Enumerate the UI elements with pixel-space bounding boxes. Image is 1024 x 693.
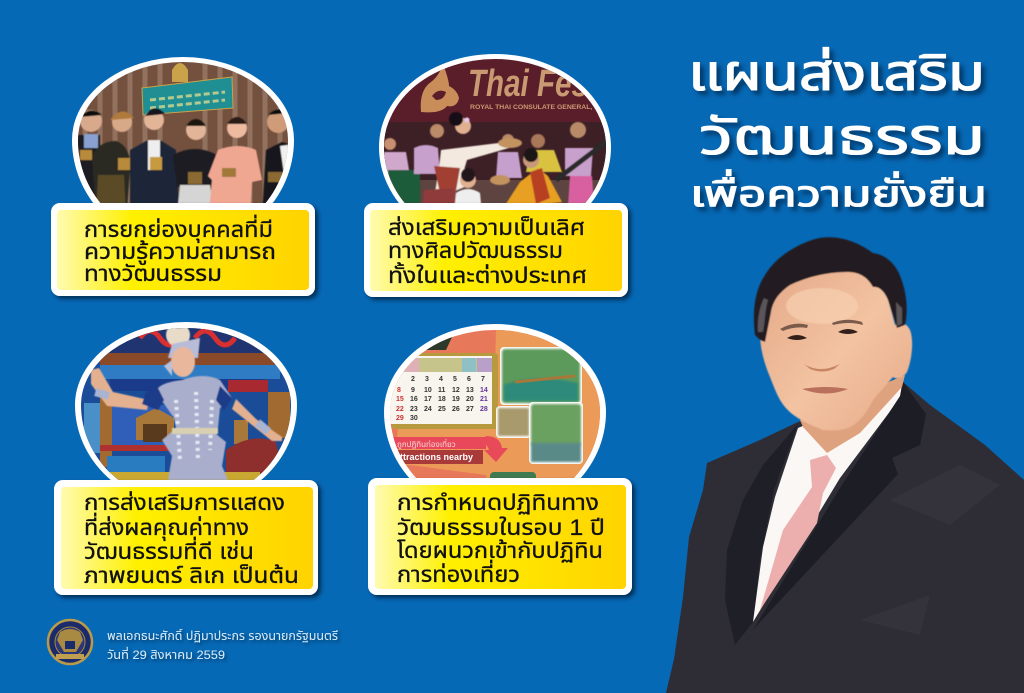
tie — [760, 455, 836, 610]
photo: tourism calendar brochure: 12 — [452, 387, 460, 394]
caption box: ความรู้ความสามารถ — [84, 239, 276, 265]
caption box — [54, 480, 318, 595]
photo: tourism calendar brochure: 13 — [466, 387, 474, 394]
photo: tourism calendar brochure: 21 — [480, 396, 488, 403]
photo: tourism calendar brochure: 9 — [411, 387, 415, 394]
photo: tourism calendar brochure: 28 — [480, 406, 488, 413]
photo: tourism calendar brochure: 23 — [410, 406, 418, 413]
caption box: ทางศิลปวัฒนธรรม — [388, 238, 563, 263]
photo: tourism calendar brochure: 26 — [452, 406, 460, 413]
caption box — [51, 203, 315, 296]
photo: tourism calendar brochure: 19 — [452, 396, 460, 403]
photo: tourism calendar brochure: 27 — [466, 406, 474, 413]
mouth — [802, 387, 848, 394]
title: เพื่อความยั่งยืน — [690, 169, 987, 214]
photo: tourism calendar brochure: 29 — [396, 415, 404, 422]
photo: tourism calendar brochure: 20 — [466, 396, 474, 403]
icon: government seal — [48, 620, 92, 664]
footer — [48, 620, 338, 664]
caption box: วัฒนธรรมในรอบ 1 ปี — [397, 515, 605, 540]
photo: tourism calendar brochure: 10 — [424, 387, 432, 394]
caption box: ที่ส่งผลคุณค่าทาง — [84, 512, 249, 541]
photo: tourism calendar brochure: 16 — [410, 396, 418, 403]
caption box: การยกย่องบุคคลที่มี — [84, 214, 273, 243]
portrait: deputy prime minister — [666, 237, 1024, 693]
photo: likay performer on stage — [75, 322, 297, 480]
panel: cultural calendar — [368, 320, 632, 595]
title — [688, 45, 987, 214]
panel: honouring cultural experts — [51, 50, 315, 296]
photo: Thai festival dance performance: ROYAL THAI CONSULATE GENERAL, CHI — [470, 105, 606, 111]
photo: tourism calendar brochure: 5 — [453, 376, 457, 383]
photo: tourism calendar brochure: 8 — [397, 387, 401, 394]
title: วัฒนธรรม — [699, 109, 985, 165]
eyebrows — [780, 320, 863, 331]
nose — [804, 364, 840, 372]
photo: Thai festival dance performance — [379, 54, 611, 203]
shirt — [753, 384, 902, 622]
photo: tourism calendar brochure: 4 — [439, 376, 443, 383]
caption box: ทั้งในและต่างประเทศ — [388, 261, 587, 288]
panel: promoting valuable performances — [54, 320, 318, 595]
panel: promoting artistic excellence — [364, 50, 628, 297]
photo: tourism calendar brochure: ttractions nearby — [400, 452, 473, 462]
caption box: การส่งเสริมการแสดง — [84, 490, 285, 515]
right lapel — [753, 382, 926, 630]
photo: tourism calendar brochure — [384, 324, 606, 478]
photo: tourism calendar brochure: 22 — [396, 406, 404, 413]
caption box: การท่องเที่ยว — [397, 559, 520, 587]
photo: tourism calendar brochure: 11 — [438, 387, 446, 394]
photo: tourism calendar brochure: 15 — [396, 396, 404, 403]
neck — [800, 375, 905, 453]
photo: tourism calendar brochure: 30 — [410, 415, 418, 422]
suit — [666, 382, 1024, 693]
caption box — [368, 478, 632, 595]
photo: tourism calendar brochure: 25 — [438, 406, 446, 413]
photo: tourism calendar brochure: 14 — [480, 387, 488, 394]
caption box: ภาพยนตร์ ลิเก เป็นต้น — [84, 563, 299, 588]
caption box: โดยผนวกเข้ากับปฏิทิน — [397, 538, 603, 563]
head and face — [754, 237, 912, 430]
caption box: วัฒนธรรมที่ดี เช่น — [84, 536, 254, 564]
photo: tourism calendar brochure: 2 — [411, 376, 415, 383]
photo: tourism calendar brochure: 17 — [424, 396, 432, 403]
photo: tourism calendar brochure: 18 — [438, 396, 446, 403]
caption box: ส่งเสริมความเป็นเลิศ — [388, 215, 585, 240]
photo: tourism calendar brochure: 6 — [467, 376, 471, 383]
photo: tourism calendar brochure: 24 — [424, 406, 432, 413]
eyes — [787, 329, 858, 340]
footer text: วันที่ 29 สิงหาคม 2559 — [107, 646, 225, 662]
caption box — [364, 203, 628, 297]
photo: tourism calendar brochure: ถูกปฏิทินท่องเที่ยว — [397, 438, 456, 450]
photo: tourism calendar brochure: 7 — [481, 376, 485, 383]
caption box: ทางวัฒนธรรม — [84, 261, 222, 286]
photo: Thai festival dance performance: Thai Festi — [468, 63, 607, 105]
footer text: พลเอกธนะศักดิ์ ปฏิมาประกร รองนายกรัฐมนตรี — [107, 629, 338, 643]
left lapel — [725, 424, 798, 645]
caption box: การกำหนดปฏิทินทาง — [397, 490, 599, 515]
title: แผนส่งเสริม — [688, 45, 985, 101]
photo: award recipients on stage — [72, 57, 294, 203]
footer text — [107, 629, 338, 662]
hair — [754, 237, 907, 342]
photo: tourism calendar brochure: 3 — [425, 376, 429, 383]
